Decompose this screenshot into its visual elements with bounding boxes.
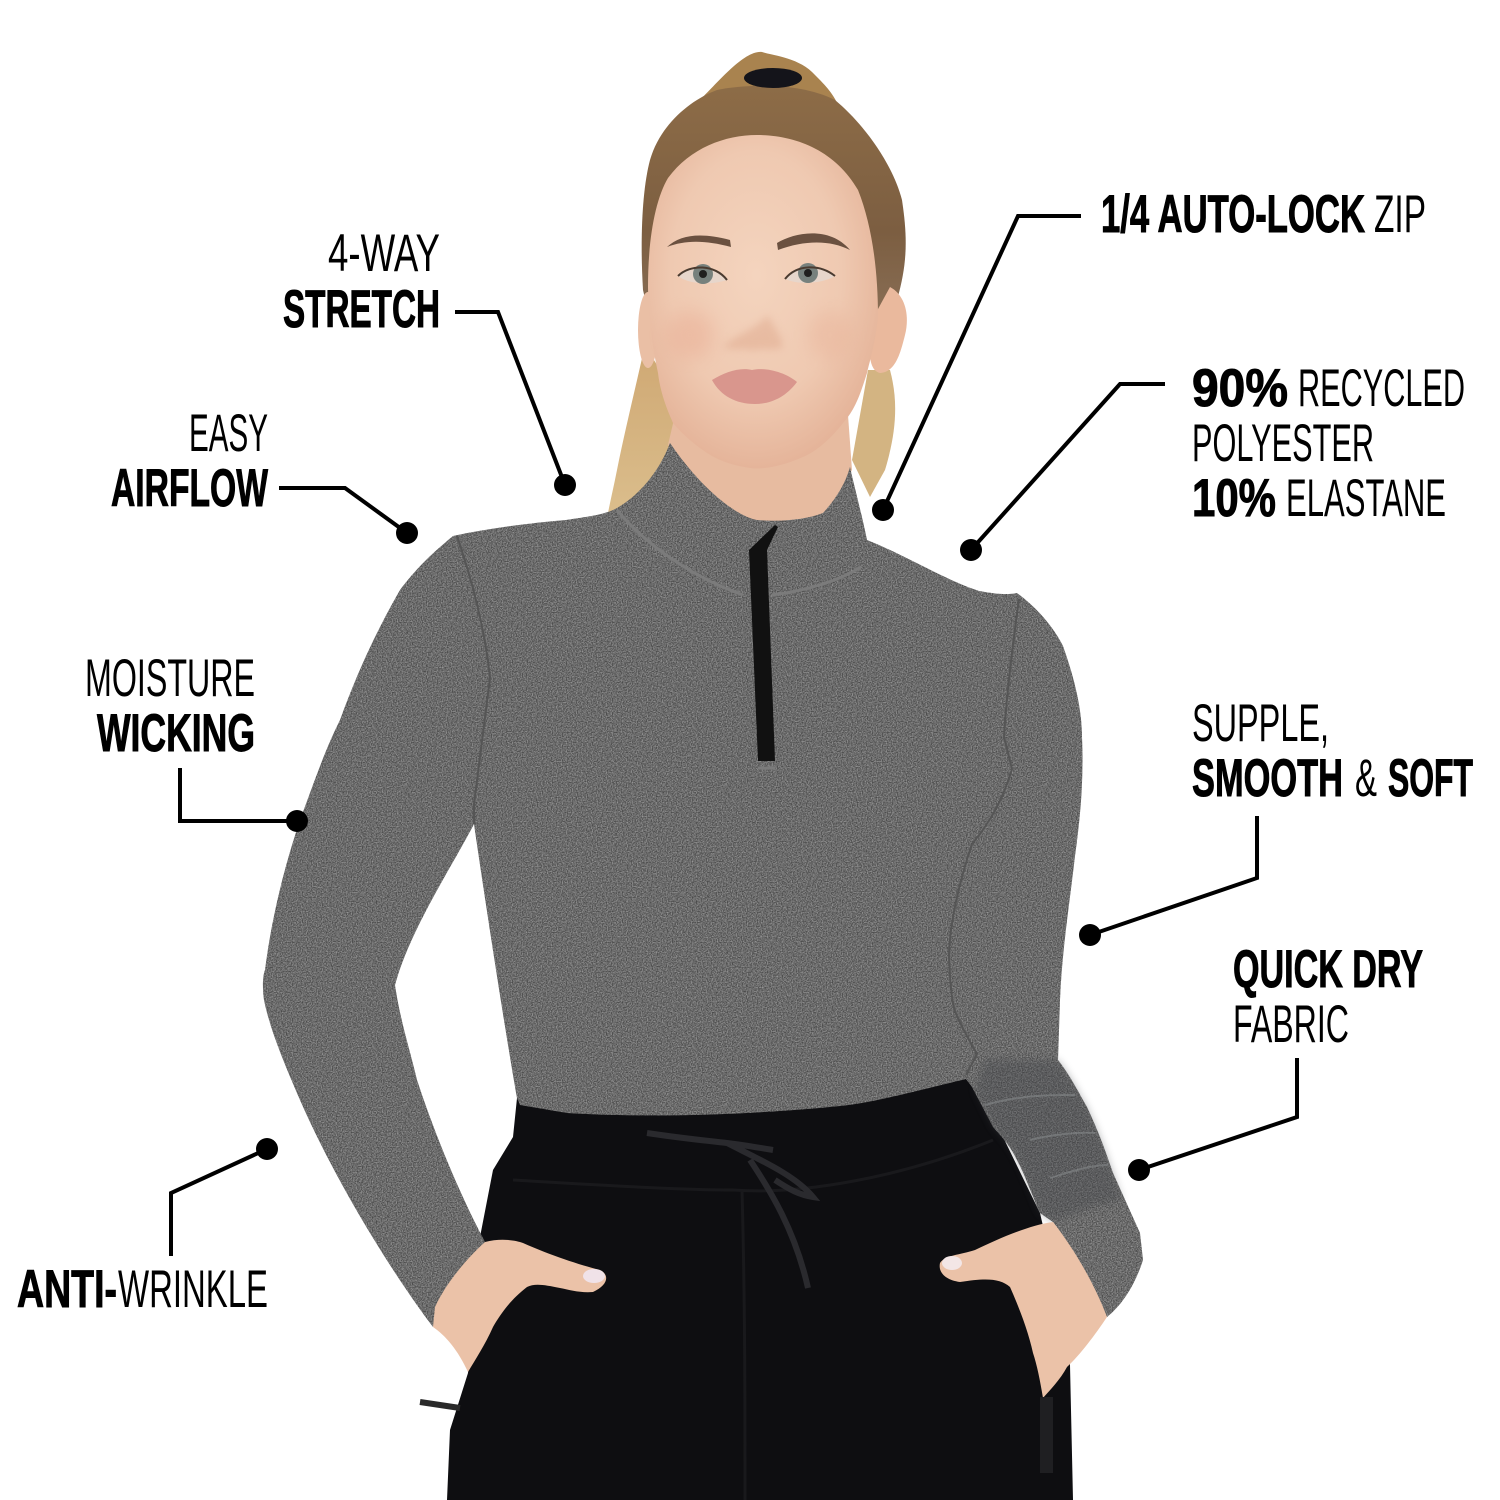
- callout: 4-way stretch: [283, 224, 576, 496]
- ponytail left strands: [604, 345, 680, 535]
- lower right sleeve shading: [975, 1060, 1122, 1222]
- left ear: [638, 292, 658, 368]
- callout: easy airflow: AIRFLOW: [111, 459, 268, 518]
- armhole and crease seams: [457, 536, 1019, 1075]
- hair tie: [744, 68, 802, 88]
- callout: supple, smooth and soft: SMOOTH: [1192, 749, 1343, 808]
- callout: 4-way stretch: STRETCH: [283, 280, 440, 339]
- right thumbnail: [942, 1256, 962, 1270]
- callout: quick dry fabric: [1128, 940, 1423, 1181]
- nose: [723, 315, 783, 351]
- callout: moisture wicking: MOISTURE: [85, 649, 255, 708]
- lips: [712, 369, 797, 404]
- callout: 1/4 auto-lock zip: ZIP: [1374, 185, 1426, 244]
- callout: 4-way stretch: 4-WAY: [328, 224, 440, 283]
- right eye: [785, 263, 835, 283]
- callout: fabric composition: 10%: [1192, 469, 1276, 528]
- zipper: [749, 525, 778, 761]
- right hand: [940, 1222, 1107, 1398]
- drawstring: [647, 1133, 813, 1288]
- left hand: [433, 1240, 606, 1372]
- neck: [668, 415, 852, 524]
- callout: supple, smooth and soft: SUPPLE,: [1192, 694, 1329, 753]
- right ear: [870, 287, 907, 373]
- callout: fabric composition: [960, 359, 1465, 561]
- callout: moisture wicking: [85, 649, 308, 832]
- callout: fabric composition: POLYESTER: [1192, 414, 1374, 473]
- callout: anti-wrinkle: WRINKLE: [118, 1260, 268, 1319]
- model photo illustration: [263, 52, 1143, 1500]
- right pocket zip: [1040, 1397, 1053, 1473]
- left eye: [678, 264, 727, 284]
- pants waistband seam: [513, 1140, 993, 1500]
- callout: 1/4 auto-lock zip: [872, 185, 1426, 521]
- right eyebrow: [777, 233, 850, 250]
- shirt: [263, 443, 1143, 1327]
- callout: quick dry fabric: FABRIC: [1233, 995, 1349, 1054]
- callout: anti-wrinkle: [17, 1138, 278, 1319]
- collar seam: [617, 510, 861, 768]
- pants: [447, 1070, 1073, 1500]
- callout: fabric composition: 90%: [1192, 359, 1288, 418]
- cheek blush: [666, 311, 852, 359]
- callout: 1/4 auto-lock zip: 1/4 AUTO-LOCK: [1101, 185, 1365, 244]
- callout: supple, smooth and soft: [1079, 694, 1473, 946]
- face: [648, 135, 878, 468]
- hair bun top: [700, 52, 840, 120]
- sleeve stripes: [985, 1095, 1108, 1178]
- callout: easy airflow: [111, 404, 418, 544]
- left eyebrow: [667, 236, 731, 247]
- pants zip pull: [420, 1402, 460, 1408]
- hair: [642, 86, 906, 330]
- callout: anti-wrinkle: ANTI-: [17, 1260, 117, 1319]
- callout: easy airflow: EASY: [189, 404, 268, 463]
- callout: supple, smooth and soft: &: [1355, 749, 1377, 808]
- ponytail right strand: [852, 370, 895, 497]
- left thumbnail: [583, 1269, 605, 1283]
- callout: moisture wicking: WICKING: [97, 704, 255, 763]
